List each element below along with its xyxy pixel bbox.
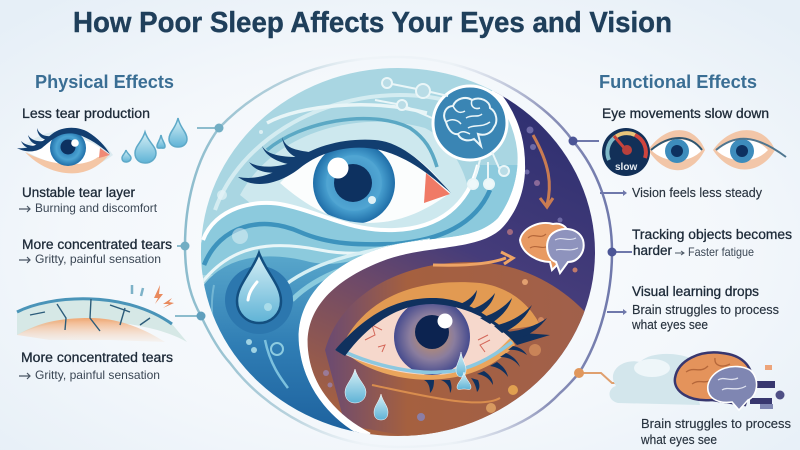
text: visual learning drops: Visual learning drops <box>632 284 759 299</box>
dark half of disk <box>308 92 595 436</box>
lower iris <box>394 299 470 375</box>
text: more concentrated tears: More concentrated tears <box>22 237 172 252</box>
heading: functional effects: Functional Effects <box>599 72 757 92</box>
text: burning and discomfort: Burning and discomfort <box>35 201 158 215</box>
text: more concentrated tears second: More concentrated tears <box>21 350 173 365</box>
illustration: cracked cornea <box>17 299 187 342</box>
text: tracking objects: Tracking objects becomes <box>632 227 792 242</box>
large water drop <box>237 253 281 323</box>
text: brain struggles: Brain struggles to process <box>632 302 779 317</box>
title: How Poor Sleep Affects Your Eyes and Vision <box>73 7 672 39</box>
lower tired eye <box>335 290 550 393</box>
icon: slow gauge <box>602 128 650 176</box>
lower tear drops <box>345 352 471 420</box>
upper healthy eye <box>238 137 451 224</box>
tear line <box>345 342 512 372</box>
orange arrow to brain bottom <box>433 252 513 265</box>
arrow <box>675 251 684 255</box>
text: brain struggles second: Brain struggles to process <box>641 416 791 431</box>
neural connector nodes <box>375 78 509 189</box>
white S-curve divider <box>303 90 521 436</box>
text: gritty sensation: Gritty, painful sensation <box>35 252 161 266</box>
right column: functional effects <box>599 72 792 447</box>
bloodshot veins <box>365 325 490 352</box>
text: faster fatigue: Faster fatigue <box>688 245 754 259</box>
lower lid and lashes <box>335 290 550 393</box>
icon: foggy brain <box>610 352 784 410</box>
icon: slow gauge: slow <box>615 162 637 173</box>
arrow <box>19 373 30 379</box>
right connector lines <box>568 136 634 387</box>
blue half of disk <box>201 68 518 433</box>
icon: irritation spark <box>132 285 174 308</box>
arrow <box>19 206 30 212</box>
arrow <box>19 257 30 263</box>
left connector lines <box>175 124 224 320</box>
icon: small eye <box>17 128 113 173</box>
text: less tear production: Less tear production <box>22 106 150 121</box>
text: unstable tear layer: Unstable tear layer <box>22 185 135 200</box>
text: what eyes see second: what eyes see <box>640 432 717 447</box>
upper iris <box>313 142 395 224</box>
icon: second tired eye <box>713 130 786 170</box>
small brain in dark half <box>520 223 584 273</box>
text: eye movements slow down: Eye movements slow down <box>602 106 769 121</box>
icon: first tired eye <box>648 130 705 170</box>
icon: tear drops <box>122 118 187 163</box>
outer ring <box>185 57 612 447</box>
text: vision feels less steady: Vision feels less steady <box>632 185 762 200</box>
orange arrow to brain top <box>533 135 553 207</box>
brain badge <box>433 86 507 160</box>
left column: physical effects <box>17 72 187 382</box>
heading: physical effects: Physical Effects <box>35 72 174 92</box>
text: what eyes see: what eyes see <box>631 317 708 332</box>
upper tear duct <box>424 173 450 203</box>
text: gritty sensation second: Gritty, painful sensation <box>35 368 160 382</box>
upper lid and lashes <box>238 137 451 193</box>
text: harder: harder <box>633 243 672 258</box>
central yin-yang disk <box>201 68 595 436</box>
